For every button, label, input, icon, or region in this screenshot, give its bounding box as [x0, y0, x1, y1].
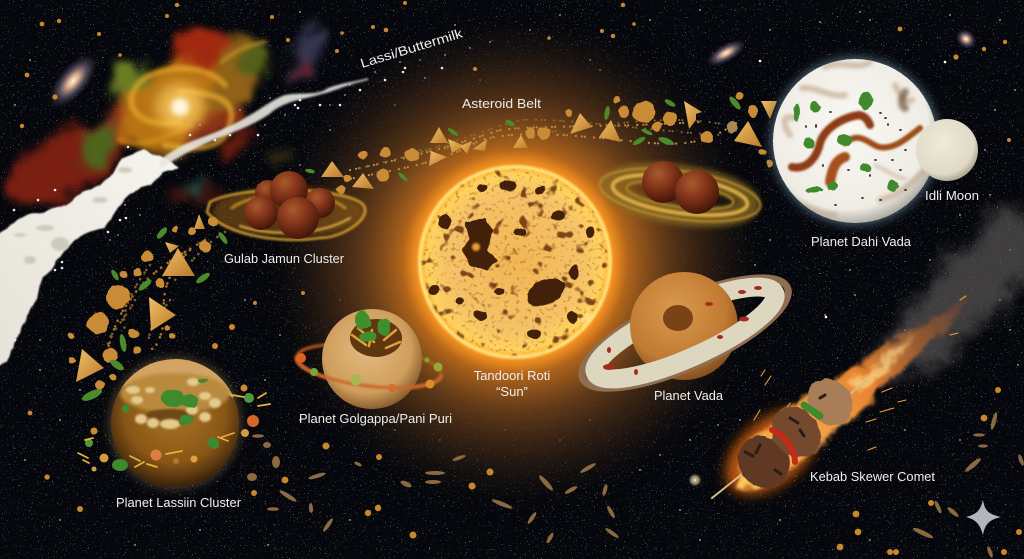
coriander garnish — [355, 311, 391, 342]
caraway seeds — [247, 412, 1024, 558]
small spiral galaxy left — [40, 46, 106, 116]
leaves — [305, 95, 742, 183]
comet flames — [710, 295, 968, 511]
meat chunks — [727, 369, 862, 499]
samosas — [321, 101, 777, 189]
planet: dahi vada — [763, 49, 947, 233]
planet: vada with chutney ring — [569, 256, 801, 410]
sparks — [754, 296, 966, 450]
black seeds — [806, 112, 906, 205]
galaxy core — [156, 83, 204, 131]
gulab jamun saturn right — [596, 160, 764, 230]
label: Lassi/Buttermilk: Lassi/Buttermilk — [358, 25, 465, 71]
herbs — [794, 92, 899, 193]
filling opening — [350, 319, 402, 357]
small galaxy top right — [952, 25, 980, 53]
orbit ring front — [294, 357, 441, 395]
golden syrup swirl — [207, 187, 365, 240]
comet smoke trail — [861, 202, 1024, 391]
ring peas — [296, 353, 306, 363]
small galaxy centre top — [702, 34, 750, 72]
sun glow — [270, 17, 760, 507]
orbit ring back — [294, 337, 444, 395]
watermark sparkle — [966, 500, 1001, 535]
label: Kebab Skewer Comet: Kebab Skewer Comet — [810, 469, 935, 484]
green pepper — [804, 405, 820, 416]
milk stream — [0, 42, 490, 368]
samosas — [76, 214, 205, 382]
label: Planet Dahi Vada: Planet Dahi Vada — [811, 234, 912, 249]
label: Tandoori Roti Sun: Tandoori Roti — [474, 368, 550, 383]
label: Planet Golgappa/Pani Puri: Planet Golgappa/Pani Puri — [299, 411, 452, 426]
spiral arms — [120, 42, 265, 148]
pakoras — [68, 217, 218, 390]
gulab jamun cluster — [207, 171, 365, 240]
label: Asteroid Belt: Asteroid Belt — [462, 96, 541, 111]
label: Tandoori Roti Sun: “Sun” — [496, 384, 528, 399]
leaves — [80, 226, 229, 403]
red pepper — [772, 430, 795, 462]
planet: lassi cluster — [78, 351, 270, 495]
label: Planet Vada: Planet Vada — [654, 388, 724, 403]
spice galaxy nebula — [0, 19, 332, 224]
planet: golgappa pani puri — [294, 309, 444, 409]
crumbs — [345, 120, 745, 180]
label: Planet Lassiin Cluster: Planet Lassiin Cluster — [116, 495, 242, 510]
asteroid belt lower left — [68, 214, 229, 403]
crumbs — [105, 232, 225, 360]
asteroid belt upper — [305, 92, 777, 194]
planet: tandoori roti sun — [412, 159, 618, 365]
distant bright star — [690, 475, 700, 485]
orbiting toppings — [78, 384, 270, 472]
label: Idli Moon: Idli Moon — [925, 188, 979, 203]
idli moon — [916, 119, 978, 181]
herb garnish — [122, 378, 219, 449]
golden rings — [596, 160, 764, 230]
ring chutney flecks — [603, 286, 762, 375]
label: Gulab Jamun Cluster: Gulab Jamun Cluster — [224, 251, 345, 266]
pakoras — [336, 92, 774, 194]
char marks — [745, 395, 825, 474]
kebab skewer — [712, 369, 866, 499]
